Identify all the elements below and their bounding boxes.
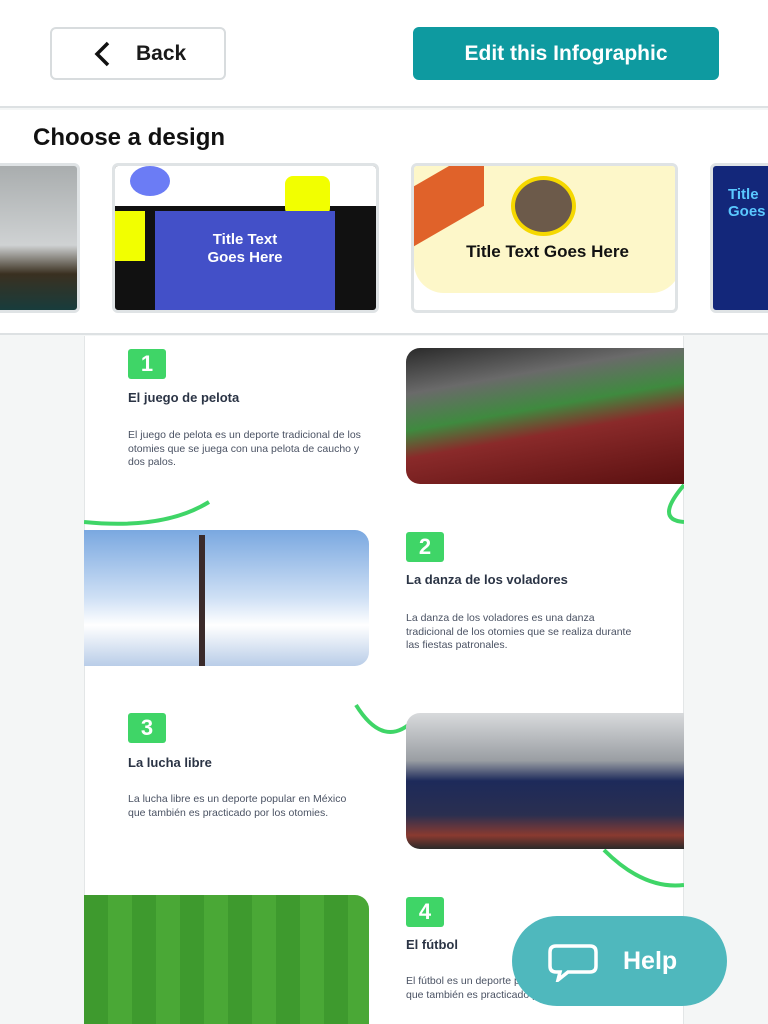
badge 3 bbox=[128, 713, 166, 743]
description 3: La lucha libre es un deporte popular en México que también es practicado por los otomies. bbox=[128, 793, 346, 818]
header bar bbox=[0, 0, 768, 108]
badge 3: 3 bbox=[141, 715, 153, 740]
back button: Back bbox=[136, 42, 186, 65]
heading: Choose a design bbox=[33, 124, 225, 151]
badge 4 bbox=[406, 897, 444, 927]
description 1: El juego de pelota es un deporte tradicional de los otomies que se juega con una pelota de caucho y dos palos. bbox=[128, 429, 361, 468]
help button: Help bbox=[623, 947, 677, 975]
description 2: La danza de los voladores es una danza tradicional de los otomies que se realiza durante las fiestas patronales. bbox=[406, 612, 631, 651]
badge 2 bbox=[406, 532, 444, 562]
main panel bbox=[84, 336, 684, 1024]
card 1 bbox=[0, 163, 80, 313]
card 3 bbox=[411, 163, 678, 313]
back button bbox=[50, 27, 226, 80]
title 3: La lucha libre bbox=[128, 755, 212, 770]
photo: stadium bbox=[406, 348, 684, 484]
edit button: Edit this Infographic bbox=[464, 42, 668, 65]
item 1 bbox=[128, 348, 684, 484]
item 3 bbox=[128, 713, 684, 849]
card 4 bbox=[710, 163, 768, 313]
title 4: El fútbol bbox=[406, 937, 458, 952]
title 2: La danza de los voladores bbox=[406, 572, 568, 587]
photo: voladores bbox=[84, 530, 369, 666]
badge 1: 1 bbox=[141, 351, 153, 376]
card 4: Goes bbox=[728, 203, 766, 220]
card 2 bbox=[112, 163, 379, 313]
photo: lucha bbox=[406, 713, 684, 849]
item 2 bbox=[84, 530, 631, 666]
card 4: Title bbox=[728, 186, 759, 203]
photo: football field bbox=[84, 895, 369, 1024]
badge 4: 4 bbox=[419, 899, 431, 924]
design chooser bbox=[0, 110, 768, 335]
badge 1 bbox=[128, 349, 166, 379]
title 1: El juego de pelota bbox=[128, 390, 239, 405]
card 2: Title Text bbox=[213, 231, 277, 248]
item 4 bbox=[84, 895, 633, 1024]
card 2: Goes Here bbox=[207, 249, 283, 266]
description 4: El fútbol es un deporte popular en todo el mundo que también es practicado por los otomies. bbox=[406, 975, 633, 1000]
edit button bbox=[413, 27, 719, 80]
help button bbox=[512, 916, 727, 1006]
card 3: Title Text Goes Here bbox=[466, 242, 629, 261]
badge 2: 2 bbox=[419, 534, 431, 559]
green curves bbox=[84, 484, 684, 888]
